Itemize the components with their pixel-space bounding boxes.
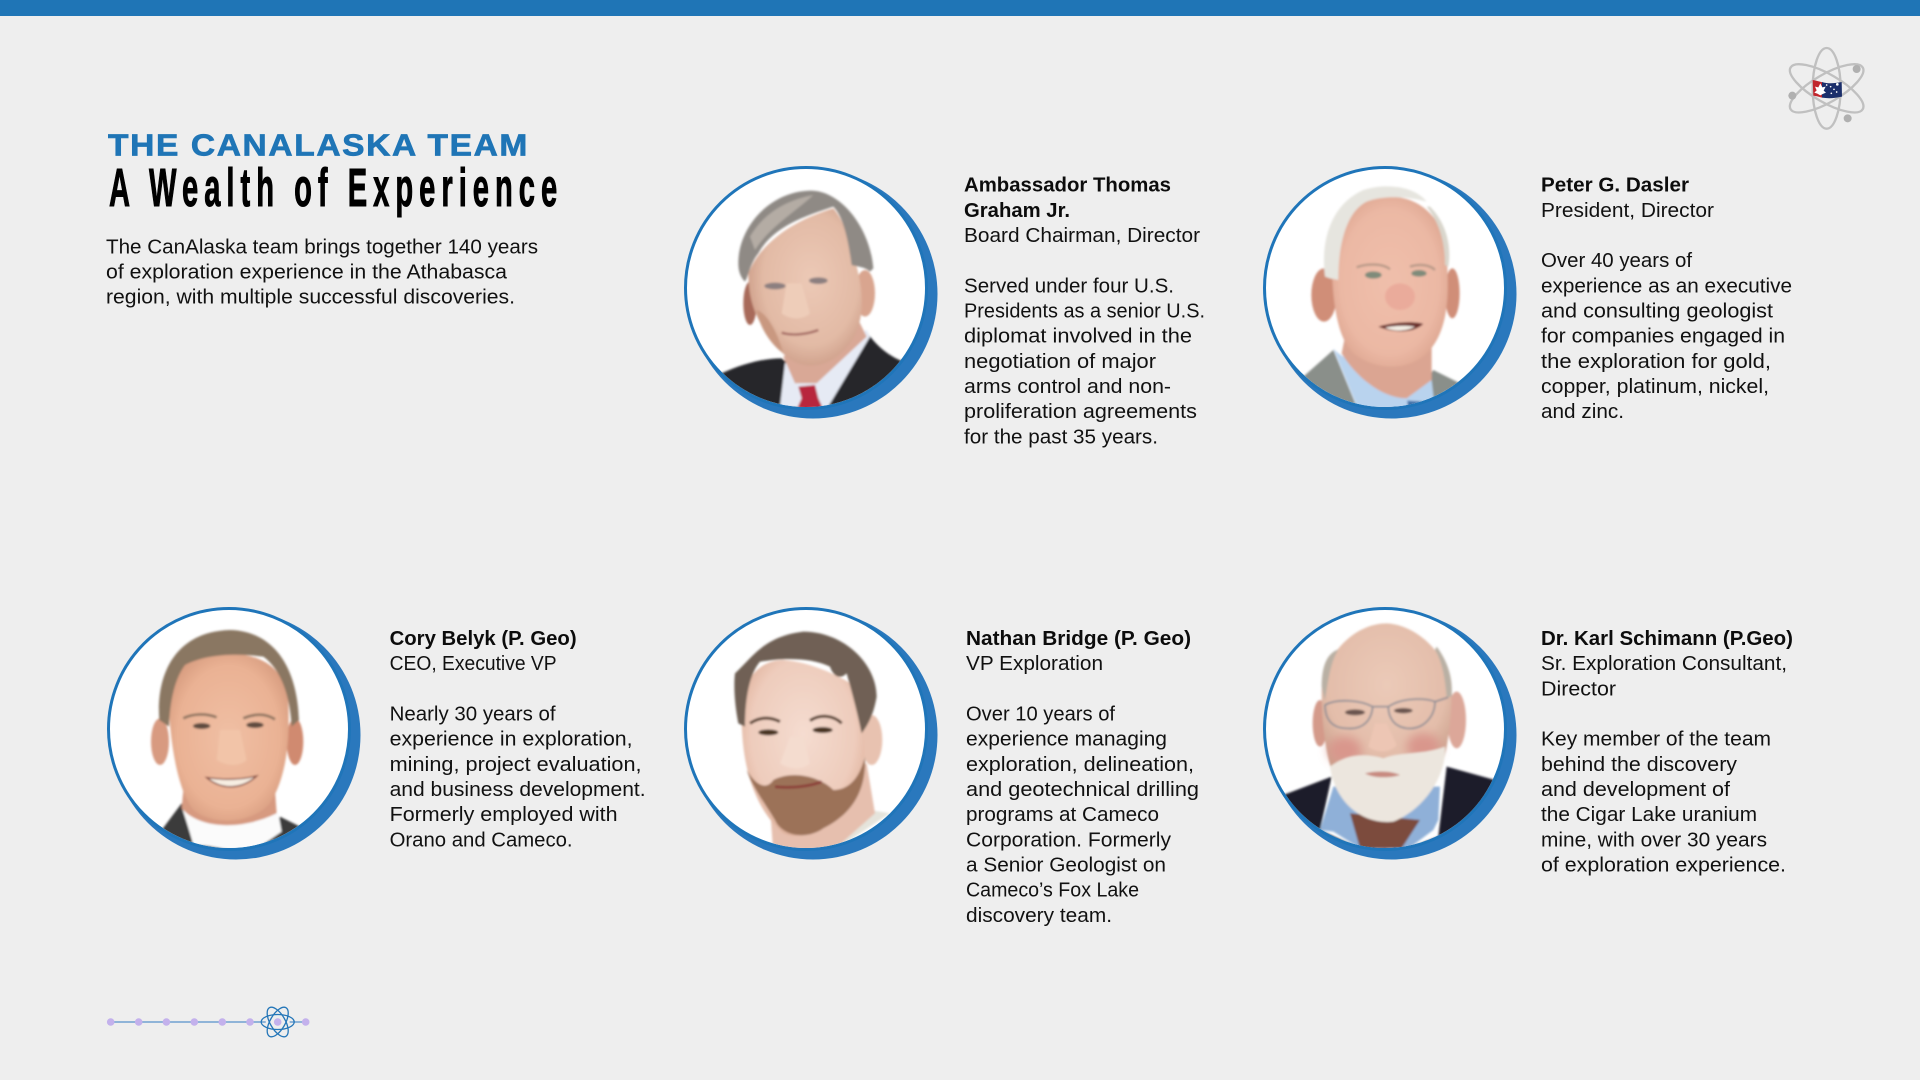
bio: Nathan Bridge: Over 10 years of [966,704,1115,726]
bio: Peter Dasler: and consulting geologist [1541,301,1773,323]
bio: Thomas Graham: Served under four U.S. [964,275,1174,297]
bio: Karl Schimann: behind the discovery [1541,754,1737,776]
bio: Peter Dasler: President, Director [1541,200,1714,222]
bio: Thomas Graham: proliferation agreements [964,401,1197,423]
progress tracker with atom icon [107,1004,310,1040]
bio: Karl Schimann: Sr. Exploration Consultant, [1541,653,1787,675]
bio: Peter Dasler [1541,175,1792,423]
intro text: of exploration experience in the Athabasca [106,261,508,283]
bio: Nathan Bridge: discovery team. [966,905,1112,927]
bio: Karl Schimann: Director [1541,678,1616,700]
portrait: Nathan Bridge [686,608,938,860]
bio: Cory Belyk: experience in exploration, [390,729,633,751]
bio: Thomas Graham: for the past 35 years. [964,426,1158,448]
panel: Nathan Bridge [686,608,1199,927]
bio: Peter Dasler: and zinc. [1541,401,1624,423]
bio: Cory Belyk: Nearly 30 years of [390,704,556,726]
bio: Cory Belyk: mining, project evaluation, [390,754,642,776]
bio: Cory Belyk: Orano and Cameco. [390,829,573,851]
portrait: Peter Dasler [1264,168,1516,430]
bio: Karl Schimann: mine, with over 30 years [1541,829,1767,851]
bio: Thomas Graham: Graham Jr. [964,200,1070,222]
bio: Karl Schimann: Key member of the team [1541,729,1771,751]
bio: Nathan Bridge: programs at Cameco [966,804,1159,826]
bio: Thomas Graham: Presidents as a senior U.S. [964,301,1205,323]
bio: Nathan Bridge: and geotechnical drilling [966,779,1199,801]
bio: Thomas Graham: Board Chairman, Director [964,225,1200,247]
intro text [106,236,538,308]
bio: Nathan Bridge: Cameco’s Fox Lake [966,880,1139,902]
panel: Thomas Graham [686,168,1205,448]
bio: Nathan Bridge: exploration, delineation, [966,754,1194,776]
bio: Cory Belyk: Cory Belyk (P. Geo) [390,628,577,650]
bio: Karl Schimann: the Cigar Lake uranium [1541,804,1757,826]
bio: Peter Dasler: for companies engaged in [1541,326,1785,348]
bio: Peter Dasler: Peter G. Dasler [1541,175,1689,197]
bio: Cory Belyk [390,628,646,851]
top bar [0,0,1920,16]
bio: Nathan Bridge: Nathan Bridge (P. Geo) [966,628,1191,650]
bio: Karl Schimann: Dr. Karl Schimann (P.Geo) [1541,628,1793,650]
bio: Karl Schimann [1541,628,1793,876]
logo: atom with flag [1784,48,1870,129]
bio: Karl Schimann: of exploration experience. [1541,854,1786,876]
heading block [106,128,557,308]
panel: Cory Belyk [108,608,646,870]
bio: Peter Dasler: experience as an executive [1541,275,1792,297]
panel: Peter Dasler [1264,168,1792,430]
portrait: Thomas Graham [686,168,938,430]
bio: Cory Belyk: and business development. [390,779,646,801]
title: the canalaska team: THE CANALASKA TEAM [108,128,529,163]
bio: Thomas Graham [964,175,1205,448]
bio: Karl Schimann: and development of [1541,779,1730,801]
bio: Cory Belyk: CEO, Executive VP [390,653,557,675]
intro text: The CanAlaska team brings together 140 years [106,236,538,258]
bio: Nathan Bridge: a Senior Geologist on [966,854,1166,876]
bio: Cory Belyk: Formerly employed with [390,804,618,826]
subtitle: a wealth of experience: A Wealth of Experience [109,159,557,218]
bio: Thomas Graham: arms control and non- [964,376,1171,398]
intro text: region, with multiple successful discoveries. [106,286,515,308]
panel: Karl Schimann [1264,608,1793,876]
portrait: Karl Schimann [1264,608,1516,870]
bio: Thomas Graham: diplomat involved in the [964,326,1192,348]
bio: Peter Dasler: Over 40 years of [1541,250,1692,272]
bio: Thomas Graham: negotiation of major [964,351,1156,373]
bio: Nathan Bridge: experience managing [966,729,1167,751]
bio: Thomas Graham: Ambassador Thomas [964,175,1171,197]
bio: Nathan Bridge: Corporation. Formerly [966,829,1171,851]
bio: Peter Dasler: copper, platinum, nickel, [1541,376,1769,398]
bio: Nathan Bridge [966,628,1199,927]
bio: Nathan Bridge: VP Exploration [966,653,1103,675]
portrait: Cory Belyk [108,608,360,870]
bio: Peter Dasler: the exploration for gold, [1541,351,1771,373]
